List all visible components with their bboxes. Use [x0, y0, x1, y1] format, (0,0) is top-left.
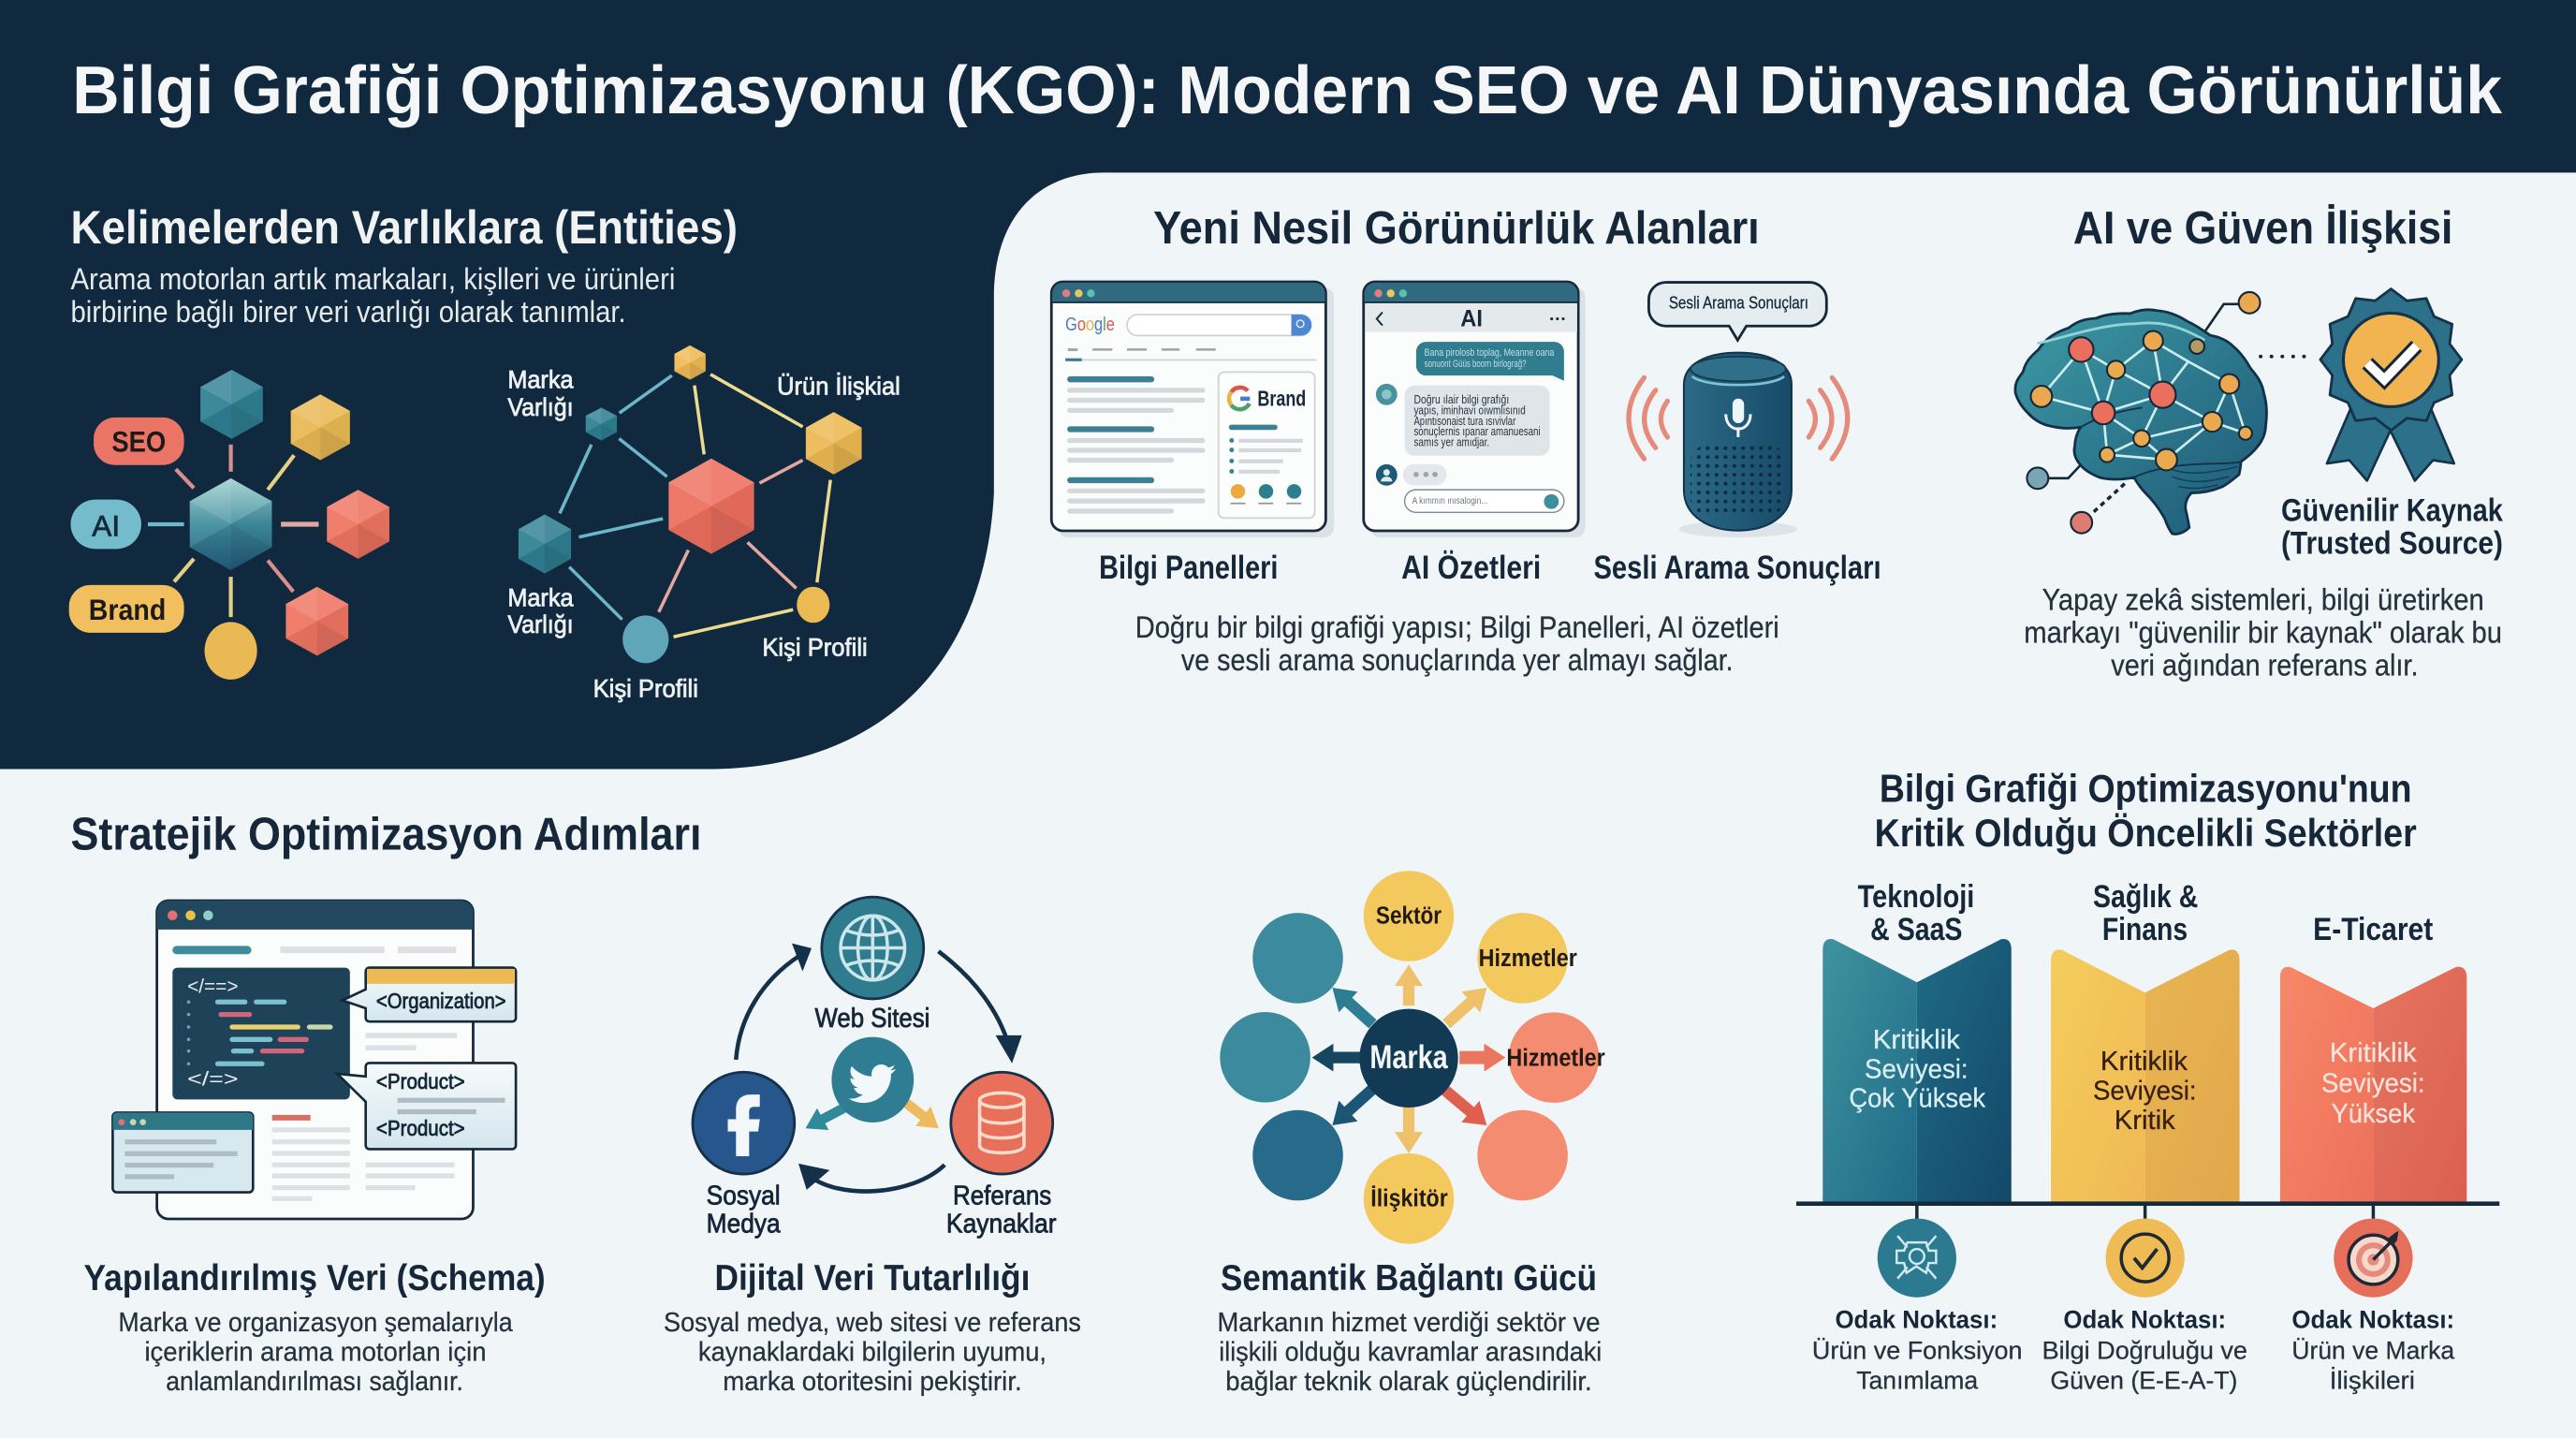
icon: checkmark [2106, 1218, 2185, 1298]
icon: technology node [1878, 1218, 1956, 1298]
labels: cycle nodes: Referans [953, 1181, 1051, 1211]
browser: knowledge panel mockup: Google [1065, 315, 1115, 335]
text block: entities description: birbirine bağlı birer veri varlığı olarak tanımlar. [70, 295, 626, 329]
chart: entity network [519, 345, 862, 663]
text block: visibility description [1135, 610, 1779, 677]
text block: technology focus: Tanımlama [1856, 1365, 1979, 1394]
labels: cycle nodes: Medya [707, 1210, 781, 1240]
text block: trust description: markayı "güvenilir bir kaynak" olarak bu [2024, 615, 2502, 649]
icon: microphone [1726, 399, 1750, 437]
heading: sectors: Kritik Olduğu Öncelikli Sektörler [1875, 812, 2417, 855]
text block: schema step: Yapılandırılmış Veri (Schema) [84, 1258, 546, 1299]
text block: technology focus [1812, 1304, 2023, 1394]
label: trusted source: (Trusted Source) [2281, 526, 2503, 562]
panel: dark header and entities background [0, 0, 2576, 770]
text block: visibility description: ve sesli arama sonuçlarında yer almayı sağlar. [1181, 643, 1734, 677]
labels: visibility columns [1099, 550, 1881, 586]
chart: data consistency cycle [693, 897, 1057, 1240]
heading: AI and trust: AI ve Güven İlişkisi [2073, 203, 2452, 254]
icon: target [2334, 1218, 2413, 1298]
bar: technology: Kritiklik [1873, 1025, 1960, 1055]
icon: twitter [799, 1037, 946, 1139]
labels: entity network: Kişi Profili [762, 632, 868, 661]
speech bubble: voice search [1648, 283, 1826, 340]
callout: organization tag: <Organization> [376, 989, 506, 1013]
chart: semantic connection hub [1220, 871, 1605, 1244]
text block: e-commerce focus: İlişkileri [2330, 1365, 2415, 1394]
illustration: schema browser [112, 901, 516, 1219]
browser: AI summary mockup: sonuont Güüs boorn birlograğ? [1425, 359, 1526, 370]
text block: trust description: veri ağından referans alır. [2111, 648, 2419, 682]
labels: cycle nodes: Sosyal [707, 1181, 781, 1211]
bar: health and finance: Kritik [2115, 1106, 2175, 1136]
text block: data consistency step: Sosyal medya, web sitesi ve referans [664, 1308, 1081, 1338]
text block: visibility description: Doğru bir bilgi grafiği yapısı; Bilgi Panelleri, AI özetleri [1135, 610, 1779, 644]
labels: hub nodes: Hizmetler [1506, 1043, 1605, 1071]
text block: e-commerce focus: Odak Noktası: [2291, 1304, 2454, 1333]
text block: semantic step [1218, 1258, 1602, 1397]
browser: AI summary mockup [1364, 282, 1586, 537]
text block: schema step [84, 1258, 546, 1397]
browser: knowledge panel mockup [1051, 282, 1334, 537]
heading: sectors [1875, 768, 2417, 855]
bar: health and finance: Kritiklik [2100, 1047, 2188, 1077]
browser: AI summary mockup: Apıntısonaist tura ısıvivlar [1413, 415, 1515, 428]
bar: e-commerce: Kritiklik [2330, 1038, 2417, 1068]
labels: sector headings [1858, 879, 2433, 947]
bar: health and finance [2051, 949, 2240, 1202]
chart: keyword hub diagram: Brand [89, 593, 166, 626]
text block: semantic step: Semantik Bağlantı Gücü [1221, 1258, 1597, 1299]
browser: AI summary mockup: Bana pirolosb toplag, Meanne oana [1425, 347, 1555, 359]
heading: sectors: Bilgi Grafiği Optimizasyonu'nun [1880, 768, 2411, 811]
text block: semantic step: bağlar teknik olarak güçlendirilir. [1225, 1367, 1592, 1397]
browser: knowledge panel mockup: Brand [1257, 387, 1306, 411]
icon: facebook [693, 1072, 795, 1174]
browser: AI summary mockup: AI [1460, 306, 1483, 331]
chart: keyword hub diagram: AI [92, 508, 120, 542]
labels: sector headings: & SaaS [1870, 912, 1962, 947]
labels: sector headings: Finans [2102, 912, 2188, 947]
heading: visibility: Yeni Nesil Görünürlük Alanları [1153, 203, 1760, 254]
text block: health focus: Bilgi Doğruluğu ve [2042, 1336, 2247, 1365]
labels: entity network: Marka [507, 583, 574, 612]
labels: hub nodes: Hizmetler [1479, 944, 1577, 972]
arrows: cycle [736, 951, 1009, 1192]
text block: data consistency step: Dijital Veri Tutarlılığı [714, 1258, 1030, 1299]
labels: sector headings: E-Ticaret [2313, 912, 2433, 947]
label: web site: Web Sitesi [815, 1004, 929, 1034]
callout: organization tag [343, 968, 516, 1021]
text block: semantic step: Markanın hizmet verdiği sektör ve [1218, 1308, 1600, 1338]
illustration: schema browser: </=> [187, 1068, 238, 1090]
text block: e-commerce focus [2291, 1304, 2455, 1394]
text block: entities description [70, 262, 675, 329]
icon: reference database [951, 1072, 1053, 1174]
bar: technology: Çok Yüksek [1849, 1083, 1986, 1113]
callout: product tags [337, 1063, 516, 1149]
panel: priority sectors [1796, 768, 2499, 1394]
labels: cycle nodes [707, 1181, 1057, 1240]
bar: technology [1822, 939, 2012, 1202]
text block: schema step: Marka ve organizasyon şemalarıyla [118, 1308, 513, 1338]
labels: hub nodes: Marka [1369, 1039, 1448, 1076]
icon: trust badge [2320, 289, 2462, 480]
text block: trust description [2024, 582, 2502, 682]
icon: brain network [2015, 292, 2267, 534]
text block: semantic step: ilişkili olduğu kavramlar arasındaki [1219, 1337, 1602, 1367]
text block: technology focus: Ürün ve Fonksiyon [1812, 1336, 2023, 1365]
callout: product tags: <Product> [376, 1116, 465, 1140]
text block: data consistency step: kaynaklardaki bilgilerin uyumu, [698, 1337, 1046, 1367]
window: small code window [112, 1112, 253, 1193]
bar: e-commerce: Yüksek [2331, 1099, 2415, 1129]
bar: technology: Seviyesi: [1865, 1055, 1969, 1085]
labels: visibility columns: AI Özetleri [1401, 550, 1541, 586]
title: Bilgi Grafiği Optimizasyonu (KGO): Modern SEO ve AI Dünyasında Görünürlük [72, 53, 2503, 128]
labels: entity network: Varlığı [507, 392, 574, 421]
labels: entity network [507, 364, 900, 702]
browser: AI summary mockup: yapıs, iminhavı oıwmlısınıd [1413, 404, 1526, 417]
labels: entity network: Marka [507, 364, 574, 393]
text block: health focus [2042, 1304, 2247, 1394]
chart: sector bars [1796, 939, 2499, 1220]
icon: web site globe [822, 897, 924, 999]
text block: trust description: Yapay zekâ sistemleri, bilgi üretirken [2042, 582, 2484, 616]
icon: sound waves [1629, 377, 1848, 459]
chart: keyword hub diagram [69, 370, 389, 680]
labels: entity network: Varlığı [507, 609, 574, 638]
labels: visibility columns: Bilgi Panelleri [1099, 550, 1278, 586]
heading: steps: Stratejik Optimizasyon Adımları [70, 810, 701, 860]
text block: health focus: Güven (E-E-A-T) [2050, 1365, 2237, 1394]
panel: new visibility areas [1051, 203, 1881, 677]
axis line [1796, 1203, 2499, 1220]
labels: visibility columns: Sesli Arama Sonuçları [1593, 550, 1881, 586]
nodes: hub circles [1220, 871, 1599, 1244]
text block: e-commerce focus: Ürün ve Marka [2291, 1336, 2455, 1365]
panel: strategic optimization steps [70, 810, 1605, 1397]
connector: brain to badge [2261, 356, 2308, 358]
bar: e-commerce [2280, 967, 2466, 1202]
browser: AI summary mockup: samıs yer amıdjar. [1413, 436, 1489, 449]
browser: AI summary mockup: Doğru ılair bilgi grafığı [1413, 393, 1509, 406]
labels: entity network: Ürün İlişkial [777, 371, 900, 400]
speech bubble: voice search: Sesli Arama Sonuçları [1669, 292, 1808, 312]
panel: AI and trust [2015, 203, 2504, 682]
heading: entities: Kelimelerden Varlıklara (Entities) [70, 201, 738, 254]
labels: entity network: Kişi Profili [593, 673, 698, 702]
icon: smart speaker [1679, 353, 1797, 537]
labels: sector headings: Sağlık & [2093, 879, 2198, 915]
illustration: schema browser: </==> [187, 976, 238, 997]
text block: health focus: Odak Noktası: [2063, 1304, 2226, 1333]
text block: data consistency step [664, 1258, 1081, 1397]
text block: data consistency step: marka otoritesini pekiştirir. [723, 1367, 1022, 1397]
panel: entities [69, 201, 900, 702]
text block: entities description: Arama motorlan artık markaları, kişlleri ve ürünleri [70, 262, 675, 296]
bar: health and finance: Seviyesi: [2093, 1076, 2197, 1106]
text block: schema step: içeriklerin arama motorlan için [144, 1337, 487, 1367]
text block: technology focus: Odak Noktası: [1835, 1304, 1998, 1333]
labels: hub nodes: Sektör [1376, 902, 1442, 930]
labels: cycle nodes: Kaynaklar [946, 1210, 1057, 1240]
browser: AI summary mockup: A kımmın ınısalogin... [1412, 496, 1487, 506]
text block: schema step: anlamlandırılması sağlanır. [166, 1367, 463, 1397]
bar: e-commerce: Seviyesi: [2321, 1068, 2425, 1098]
arrows: hub [1312, 964, 1505, 1153]
chart: keyword hub diagram: SEO [111, 425, 166, 459]
callout: product tags: <Product> [376, 1069, 465, 1093]
label: trusted source: Güvenilir Kaynak [2281, 492, 2504, 528]
labels: hub nodes [1369, 902, 1605, 1211]
label: trusted source [2281, 492, 2504, 562]
labels: sector headings: Teknoloji [1858, 879, 1974, 915]
labels: hub nodes: İlişkitör [1370, 1183, 1448, 1211]
browser: AI summary mockup: sonuçlernis ıpanar amanuesani [1413, 425, 1541, 438]
